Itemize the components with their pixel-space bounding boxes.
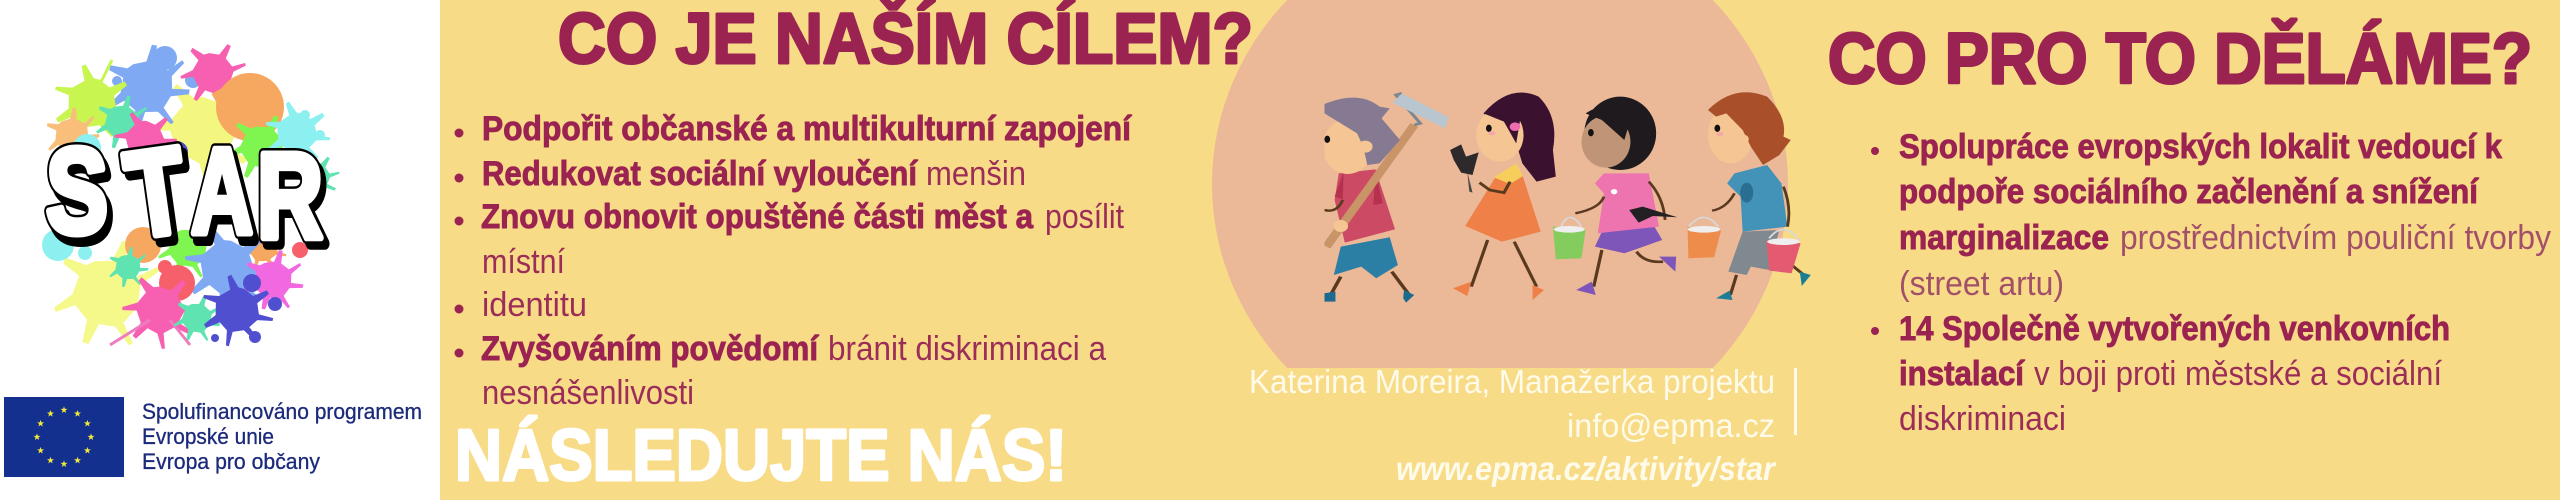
- illustration: four children with painting tools: [1322, 92, 1811, 303]
- logo: STAR graffiti lettering: R: [257, 128, 323, 264]
- panel: white logo column: [0, 0, 440, 500]
- child 3 with bucket: [1553, 97, 1677, 295]
- text block: goals list: místní: [482, 243, 565, 281]
- contact block: Katerina Moreira, Manažerka projektu: [1249, 363, 1775, 400]
- logo: STAR graffiti lettering: S: [46, 123, 108, 259]
- text block: goals list: nesnášenlivosti: [482, 374, 694, 412]
- text block: goals list: bránit diskriminaci a: [828, 330, 1106, 368]
- logo: STAR graffiti lettering: T: [123, 127, 199, 270]
- text block: goals list: menšin: [926, 155, 1026, 193]
- contact block: www.epma.cz/aktivity/star: [1396, 450, 1777, 487]
- logo: STAR graffiti lettering: A: [191, 123, 253, 259]
- text block: actions list: Spolupráce evropských lokalit vedoucí k: [1899, 128, 2502, 166]
- logo: STAR graffiti lettering: S: [50, 130, 112, 266]
- logo: STAR graffiti lettering: S: [46, 123, 108, 259]
- text block: goals list: Znovu obnovit opuštěné části měst a: [481, 198, 1034, 236]
- call to action: follow us: NÁSLEDUJTE NÁS!: [455, 416, 1067, 496]
- text block: goals list: Zvyšováním povědomí: [481, 330, 819, 368]
- child 1 with roller: [1322, 93, 1449, 303]
- logo: STAR graffiti lettering: T: [118, 121, 194, 264]
- logo: STAR graffiti lettering: A: [191, 123, 253, 259]
- EU flag: [4, 397, 124, 477]
- logo: STAR graffiti lettering: [46, 121, 327, 270]
- text block: actions list: (street artu): [1899, 265, 2064, 303]
- EU funding text: Evropské unie: [142, 424, 274, 449]
- EU funding text: Evropa pro občany: [142, 449, 320, 474]
- heading: our goal: CO JE NAŠÍM CÍLEM?: [558, 0, 1253, 79]
- text block: goals list: identitu: [482, 286, 587, 324]
- text block: actions list: 14 Společně vytvořených venkovních: [1899, 310, 2450, 348]
- text block: goals list: Redukovat sociální vyloučení: [482, 155, 918, 193]
- EU funding text: Spolufinancováno programem: [142, 399, 422, 424]
- logo: STAR graffiti lettering: T: [118, 121, 194, 264]
- logo: STAR paint splatter: [40, 30, 348, 363]
- logo: STAR graffiti lettering: R: [257, 128, 323, 264]
- text block: actions list: marginalizace: [1899, 219, 2109, 257]
- EU funding text: [142, 399, 422, 474]
- text block: actions list: v boji proti městské a sociální: [2034, 355, 2443, 393]
- text block: goals list: Podpořit občanské a multikulturní zapojení: [482, 110, 1132, 148]
- peach circle backdrop: [1212, 0, 1788, 368]
- text block: actions list: diskriminaci: [1899, 400, 2066, 438]
- contact block: info@epma.cz: [1567, 407, 1775, 444]
- logo: STAR graffiti lettering: R: [261, 134, 327, 270]
- contact block: [1249, 363, 1797, 487]
- text block: goals list: [454, 110, 1132, 412]
- text block: actions list: podpoře sociálního začlenění a snížení: [1899, 173, 2479, 211]
- text block: goals list: posílit: [1045, 198, 1124, 236]
- child 2 with brush: [1450, 93, 1556, 300]
- text block: actions list: instalací: [1899, 355, 2025, 393]
- child 4 with buckets: [1688, 92, 1811, 300]
- text block: actions list: [1871, 128, 2551, 438]
- logo: STAR graffiti lettering: A: [195, 130, 257, 266]
